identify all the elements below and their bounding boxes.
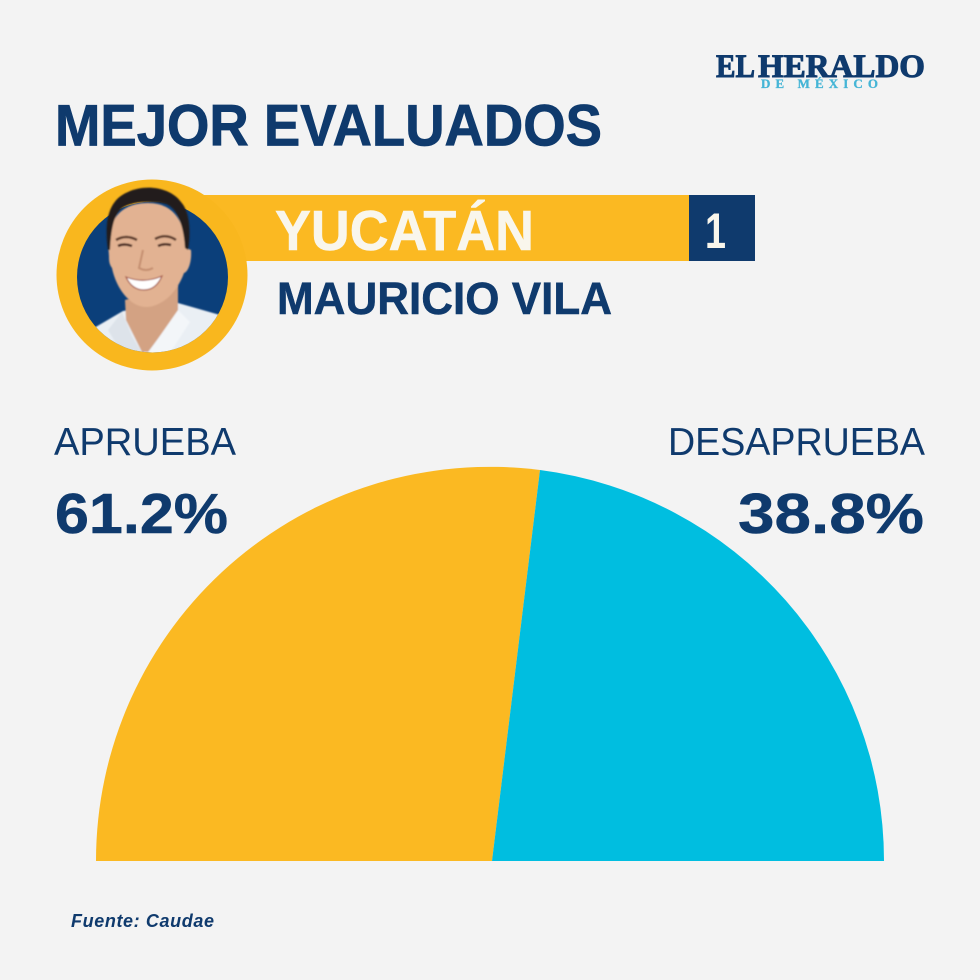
label: aprueba: APRUEBA: [54, 421, 236, 464]
hair: [107, 188, 190, 250]
face: [108, 203, 191, 307]
rank number: 1: [705, 203, 726, 259]
segment: aprueba 61.2%: [96, 467, 540, 861]
semicircle chart: [96, 467, 884, 861]
logo: El Heraldo de México: EL: [716, 49, 755, 85]
logo: El Heraldo de México: [716, 49, 925, 91]
logo: El Heraldo de México: HERALDO: [758, 49, 925, 85]
name banner: [200, 195, 755, 263]
label: desaprueba: DESAPRUEBA: [668, 421, 925, 464]
segment: desaprueba 38.8%: [492, 470, 884, 861]
value: desaprueba: 38.8%: [738, 482, 924, 546]
source: Fuente: Caudae: [71, 911, 214, 931]
label: aprueba: [54, 421, 236, 546]
governor name: MAURICIO VILA: [277, 273, 612, 324]
value: aprueba: 61.2%: [55, 482, 228, 546]
portrait badge: [56, 180, 248, 370]
smile: [126, 276, 162, 290]
rank box: [689, 195, 755, 261]
state name: YUCATÁN: [275, 199, 534, 263]
label: desaprueba: [668, 421, 925, 546]
logo: El Heraldo de México: DE MÉXICO: [761, 76, 878, 91]
title: MEJOR EVALUADOS: [55, 94, 602, 158]
